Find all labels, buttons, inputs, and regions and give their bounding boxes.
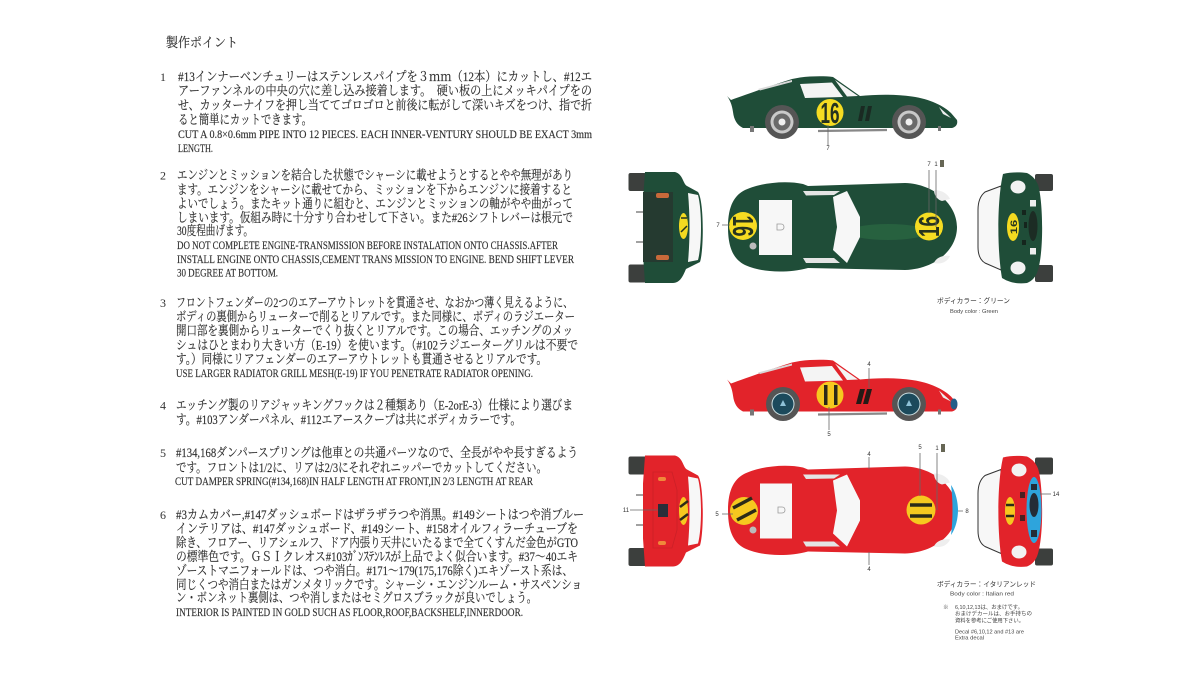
step 5: #134,168ダンパースプリングは他車との共通パーツなので、全長がやや長すぎるよう: [176, 445, 578, 460]
body colour caption red and extra decal note: おまけデカールは、お手持ちの: [955, 610, 1032, 618]
red car top view: 5: [715, 512, 719, 518]
step 1: アーファンネルの中央の穴に差し込み接着します。 硬い板の上にメッキパイプをの: [178, 83, 592, 98]
step 3: シュはひとまわり大きい方（E-19）を使います。（#102ラジエーターグリルは不要で: [176, 338, 578, 352]
body colour caption red and extra decal note: ※: [943, 604, 949, 611]
body colour caption green: [937, 296, 1010, 315]
red car side view: [727, 360, 958, 438]
step 4: す。#103アンダーパネル、#112エアースクープは共にボディカラーです。: [176, 412, 521, 427]
step 6: INTERIOR IS PAINTED IN GOLD SUCH AS FLOOR,ROOF,BACKSHELF,INNERDOOR.: [176, 605, 523, 619]
green car front view: [978, 172, 1053, 283]
step 1: LENGTH.: [178, 141, 213, 155]
body colour caption red and extra decal note: Decal #6,10,12 and #13 are: [955, 630, 1024, 636]
step 1: CUT A 0.8×0.6mm PIPE INTO 12 PIECES. EACH INNER-VENTURY SHOULD BE EXACT 3mm: [178, 127, 593, 141]
red car top view: 4: [867, 452, 871, 458]
body colour caption red and extra decal note: Body color : Italian red: [950, 592, 1014, 598]
step 2: しまいます。仮組み時に十分すり合わせして下さい。また#26シフトレバーは根元で: [177, 210, 573, 225]
green car side view: [727, 76, 957, 152]
step 4: エッチング製のリアジャッキングフックは２種類あり（E-2orE-3）仕様により選びま: [176, 398, 573, 412]
step 6: 除き、フロアー、リアシェルフ、ドア内張り天井にいたるまで全てくすんだ金色がGTO: [176, 535, 578, 550]
red car top view: 1: [935, 446, 939, 452]
step 6: インテリアは、#147ダッシュボード、#149シート、#158オイルフィラーチューブを: [176, 521, 578, 536]
step 3: 3: [160, 296, 166, 310]
step 6: #3カムカバー,#147ダッシュボードはザラザラつや消黒。#149シートはつや消ブルー: [176, 507, 584, 522]
green car top view: 16: [726, 216, 758, 236]
red car top view: 5: [918, 445, 922, 451]
red car rear view: [623, 456, 703, 566]
step 2: 30度程曲げます。: [177, 223, 253, 238]
step 2: [160, 168, 574, 280]
step 5: です。フロントは1/2に、リアは2/3にそれぞれニッパーでカットしてください。: [176, 460, 547, 475]
body colour caption red and extra decal note: ボディカラー：イタリアンレッド: [937, 580, 1036, 588]
body colour caption red and extra decal note: [937, 580, 1036, 642]
red car top view: 4: [867, 567, 871, 573]
step 1: 1: [160, 70, 166, 84]
step 6: [160, 507, 584, 619]
red car top view: 8: [965, 509, 969, 515]
green car top view: 7: [716, 223, 720, 229]
red car side view: 5: [827, 432, 831, 438]
step 2: 30 DEGREE AT BOTTOM.: [177, 266, 278, 280]
step 5: [160, 445, 578, 488]
step 5: 5: [160, 446, 166, 460]
body colour caption red and extra decal note: 資料を参考にご使用下さい。: [955, 616, 1024, 624]
title: 製作ポイント: [166, 35, 238, 50]
step 1: #13インナーベンチュリーはステンレスパイプを３ｍｍ（12本）にカットし、#12エ: [178, 69, 592, 84]
red car front view: 14: [1053, 492, 1060, 498]
step 2: よいでしょう。またキット通りに組むと、エンジンとミッションの軸がやや曲がって: [177, 196, 573, 211]
step 2: INSTALL ENGINE ONTO CHASSIS,CEMENT TRANS MISSION TO ENGINE. BEND SHIFT LEVER: [177, 252, 574, 266]
step 5: CUT DAMPER SPRING(#134,168)IN HALF LENGTH AT FRONT,IN 2/3 LENGTH AT REAR: [175, 474, 533, 488]
body colour caption green: Body color : Green: [950, 309, 998, 315]
step 1: せ、カッターナイフを押し当ててゴロゴロと前後に転がして深いキズをつけ、指で折: [178, 98, 592, 112]
green car front view: 16: [1010, 220, 1019, 234]
car illustrations: [623, 76, 1060, 642]
step 1: [160, 69, 593, 155]
step 6: ン・ボンネット裏側は、つや消しまたはセミグロスブラックが良いでしょう。: [176, 590, 537, 605]
green car rear view: [628, 172, 703, 283]
body colour caption red and extra decal note: Extra decal: [955, 636, 984, 642]
red car top view: [715, 444, 969, 573]
green car top view: [716, 160, 957, 272]
step 3: ボディの裏側からリューターで削るとリアルです。また同様に、ボディのラジエーター: [176, 309, 575, 324]
step 6: ゾーストマニフォールドは、つや消白。#171～179(175,176除く)エキゾースト系は、: [176, 563, 573, 578]
step 2: 2: [160, 168, 166, 182]
red car side view: 4: [867, 362, 871, 368]
red car front view: [978, 456, 1060, 567]
step 1: ると簡単にカットできます。: [178, 112, 312, 127]
step 3: す。）同様にリアフェンダーのエアーアウトレットも貫通させるとリアルです。: [176, 352, 547, 366]
step 6: 同じくつや消白またはガンメタリックです。シャーシ・エンジンルーム・サスペンショ: [176, 577, 582, 592]
step 3: フロントフェンダーの2つのエアーアウトレットを貫通させ、なおかつ薄く見えるように、: [176, 295, 573, 310]
red car rear view: 11: [623, 508, 630, 514]
green car side view: 16: [820, 98, 840, 130]
step 2: ます。エンジンをシャーシに載せてから、ミッションを下からエンジンに接着すると: [177, 182, 572, 197]
step 4: 4: [160, 398, 166, 412]
step 6: の標準色です。ＧＳＩクレオス#103ｶﾞﾝｽﾃﾝﾚｽが上品でよく似合います。#37～40エキ: [176, 549, 578, 564]
step 6: 6: [160, 508, 166, 522]
step 2: DO NOT COMPLETE ENGINE-TRANSMISSION BEFORE INSTALATION ONTO CHASSIS.AFTER: [177, 238, 558, 252]
green car top view: 1: [934, 162, 938, 168]
green car side view: 7: [826, 146, 830, 152]
green car top view: 7: [927, 162, 931, 168]
step 3: USE LARGER RADIATOR GRILL MESH(E-19) IF YOU PENETRATE RADIATOR OPENING.: [176, 366, 533, 380]
step 4: [160, 398, 573, 427]
body colour caption red and extra decal note: 6,10,12,13は、おまけです。: [955, 604, 1023, 611]
body colour caption green: ボディカラー：グリーン: [937, 296, 1010, 305]
step 2: エンジンとミッションを結合した状態でシャーシに載せようとするとやや無理があり: [177, 168, 573, 182]
step 3: [160, 295, 578, 380]
green car top view: 16: [914, 216, 946, 237]
step 3: 開口部を裏側からリューターでくり抜くとリアルです。この場合、エッチングのメッ: [176, 323, 573, 338]
instructions text column: [160, 35, 593, 619]
